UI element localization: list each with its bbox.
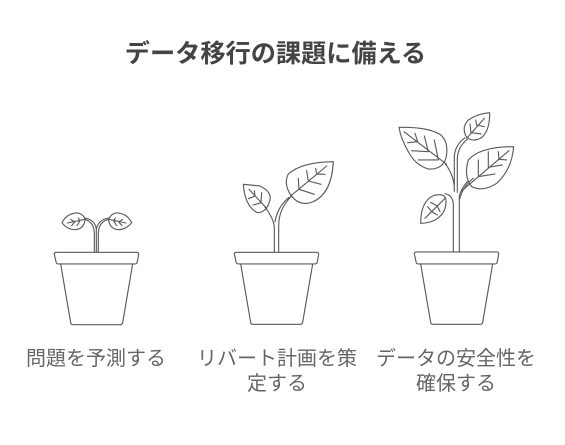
plant 2: young plant in pot: [234, 162, 333, 324]
label: step 3: [376, 348, 536, 395]
stem and leaves: [62, 213, 132, 252]
label: step 2: 定する: [247, 373, 307, 395]
label: step 3: 確保する: [416, 373, 496, 395]
label: step 2: [197, 348, 357, 395]
label: step 2: リバート計画を策: [197, 348, 357, 370]
plant 3: grown plant in pot: [399, 113, 514, 324]
stem and leaves: [243, 162, 333, 252]
label: step 1: 問題を予測する: [26, 348, 166, 370]
label: step 3: データの安全性を: [376, 348, 536, 370]
plant 1: seedling in pot: [54, 213, 139, 325]
pot: [234, 252, 319, 324]
stem and leaves: [399, 113, 514, 252]
title: データ移行の課題に備える: [125, 40, 426, 68]
pot: [414, 252, 499, 324]
pot: [54, 252, 139, 325]
